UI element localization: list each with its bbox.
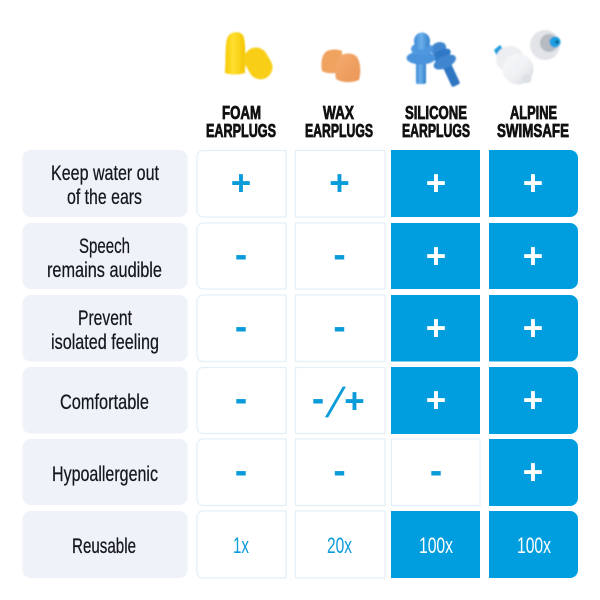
heading: foam earplugs: EARPLUGS	[206, 121, 276, 141]
alpine cell: plus: +	[523, 381, 543, 420]
foam cell: plus	[197, 150, 286, 217]
heading: silicone earplugs	[402, 103, 470, 141]
heading: silicone earplugs: SILICONE	[405, 103, 467, 123]
alpine cell: plus: +	[523, 453, 543, 492]
label: comfortable	[22, 367, 188, 434]
label: keep water out of the ears	[22, 150, 188, 217]
wax cell: minus slash plus: -	[312, 378, 324, 419]
wax cell: minus slash plus: +	[344, 382, 365, 421]
label: keep water out of the ears: Keep water out	[51, 162, 159, 185]
wax cell: minus: -	[333, 450, 346, 491]
label: reusable: Reusable	[72, 535, 136, 558]
foam cell: minus: -	[235, 450, 247, 491]
alpine cell: plus	[489, 439, 578, 506]
foam cell: minus: -	[235, 378, 247, 419]
label: prevent isolated feeling: isolated feeling	[51, 331, 159, 354]
silicone cell: plus	[391, 150, 480, 217]
alpine cell: plus: +	[523, 309, 543, 348]
alpine cell: 100x	[489, 511, 578, 578]
label: hypoallergenic: Hypoallergenic	[52, 463, 158, 486]
row: reusable	[22, 511, 578, 578]
foam cell: minus	[197, 223, 286, 289]
wax cell: minus	[296, 223, 385, 289]
label: hypoallergenic	[22, 439, 188, 505]
heading: Alpine SwimSafe: SWIMSAFE	[497, 121, 569, 141]
heading: foam earplugs: FOAM	[222, 103, 261, 123]
label: reusable	[22, 511, 188, 578]
alpine cell: plus	[489, 223, 578, 289]
row: keep water out of the ears	[22, 150, 578, 217]
alpine cell: plus	[489, 295, 578, 362]
alpine cell: plus	[489, 150, 578, 217]
label: speech remains audible: Speech	[79, 235, 130, 258]
label: prevent isolated feeling	[22, 295, 188, 362]
heading: wax earplugs: WAX	[323, 103, 354, 123]
silicone cell: 100x	[391, 511, 480, 578]
wax cell: minus: -	[333, 306, 346, 347]
label: speech remains audible: remains audible	[47, 259, 162, 282]
wax cell: minus slash plus	[296, 368, 385, 434]
foam cell: minus: -	[235, 306, 247, 347]
wax cell: minus	[296, 295, 385, 362]
silicone cell: plus: +	[426, 381, 446, 420]
heading: Alpine SwimSafe	[497, 103, 569, 141]
heading: silicone earplugs: EARPLUGS	[402, 121, 470, 141]
silicone cell: plus	[391, 223, 480, 289]
label: speech remains audible	[22, 223, 188, 289]
foam cell: minus	[197, 439, 286, 506]
label: keep water out of the ears: of the ears	[67, 186, 142, 209]
silicone cell: plus: +	[426, 309, 446, 348]
icon: Alpine SwimSafe earplugs	[494, 30, 560, 84]
icon: foam earplugs	[225, 32, 277, 84]
silicone cell: plus	[391, 295, 480, 362]
silicone cell: plus: +	[426, 237, 446, 276]
heading: foam earplugs	[206, 103, 276, 141]
heading: wax earplugs: EARPLUGS	[305, 121, 373, 141]
label: prevent isolated feeling: Prevent	[78, 307, 132, 330]
alpine cell: 100x: 100x	[517, 533, 551, 558]
row: speech remains audible	[22, 223, 578, 289]
wax cell: 20x	[296, 511, 385, 578]
wax cell: minus slash plus: /	[322, 380, 348, 427]
label: comfortable: Comfortable	[60, 391, 149, 414]
foam cell: 1x: 1x	[233, 533, 249, 558]
wax cell: plus: +	[329, 164, 350, 203]
row: hypoallergenic	[22, 439, 578, 506]
row: comfortable	[22, 367, 578, 434]
alpine cell: plus	[489, 367, 578, 434]
foam cell: minus	[197, 295, 286, 362]
foam cell: minus: -	[235, 234, 247, 275]
icon: silicone earplugs	[406, 32, 467, 91]
silicone cell: plus: +	[426, 164, 446, 203]
wax cell: 20x: 20x	[327, 533, 352, 558]
wax cell: plus	[296, 150, 385, 217]
foam cell: minus	[197, 368, 286, 434]
heading: wax earplugs	[305, 103, 373, 141]
wax cell: minus	[296, 439, 385, 506]
foam cell: plus: +	[231, 164, 251, 203]
silicone cell: minus: -	[430, 450, 442, 491]
silicone cell: 100x: 100x	[419, 533, 453, 558]
silicone cell: minus	[392, 439, 480, 506]
row: prevent isolated feeling	[22, 295, 578, 362]
silicone cell: plus	[391, 367, 480, 434]
icon: wax earplugs	[321, 50, 360, 82]
wax cell: minus: -	[333, 234, 346, 275]
foam cell: 1x	[197, 511, 286, 578]
heading: Alpine SwimSafe: ALPINE	[510, 103, 557, 123]
alpine cell: plus: +	[523, 164, 543, 203]
alpine cell: plus: +	[523, 237, 543, 276]
